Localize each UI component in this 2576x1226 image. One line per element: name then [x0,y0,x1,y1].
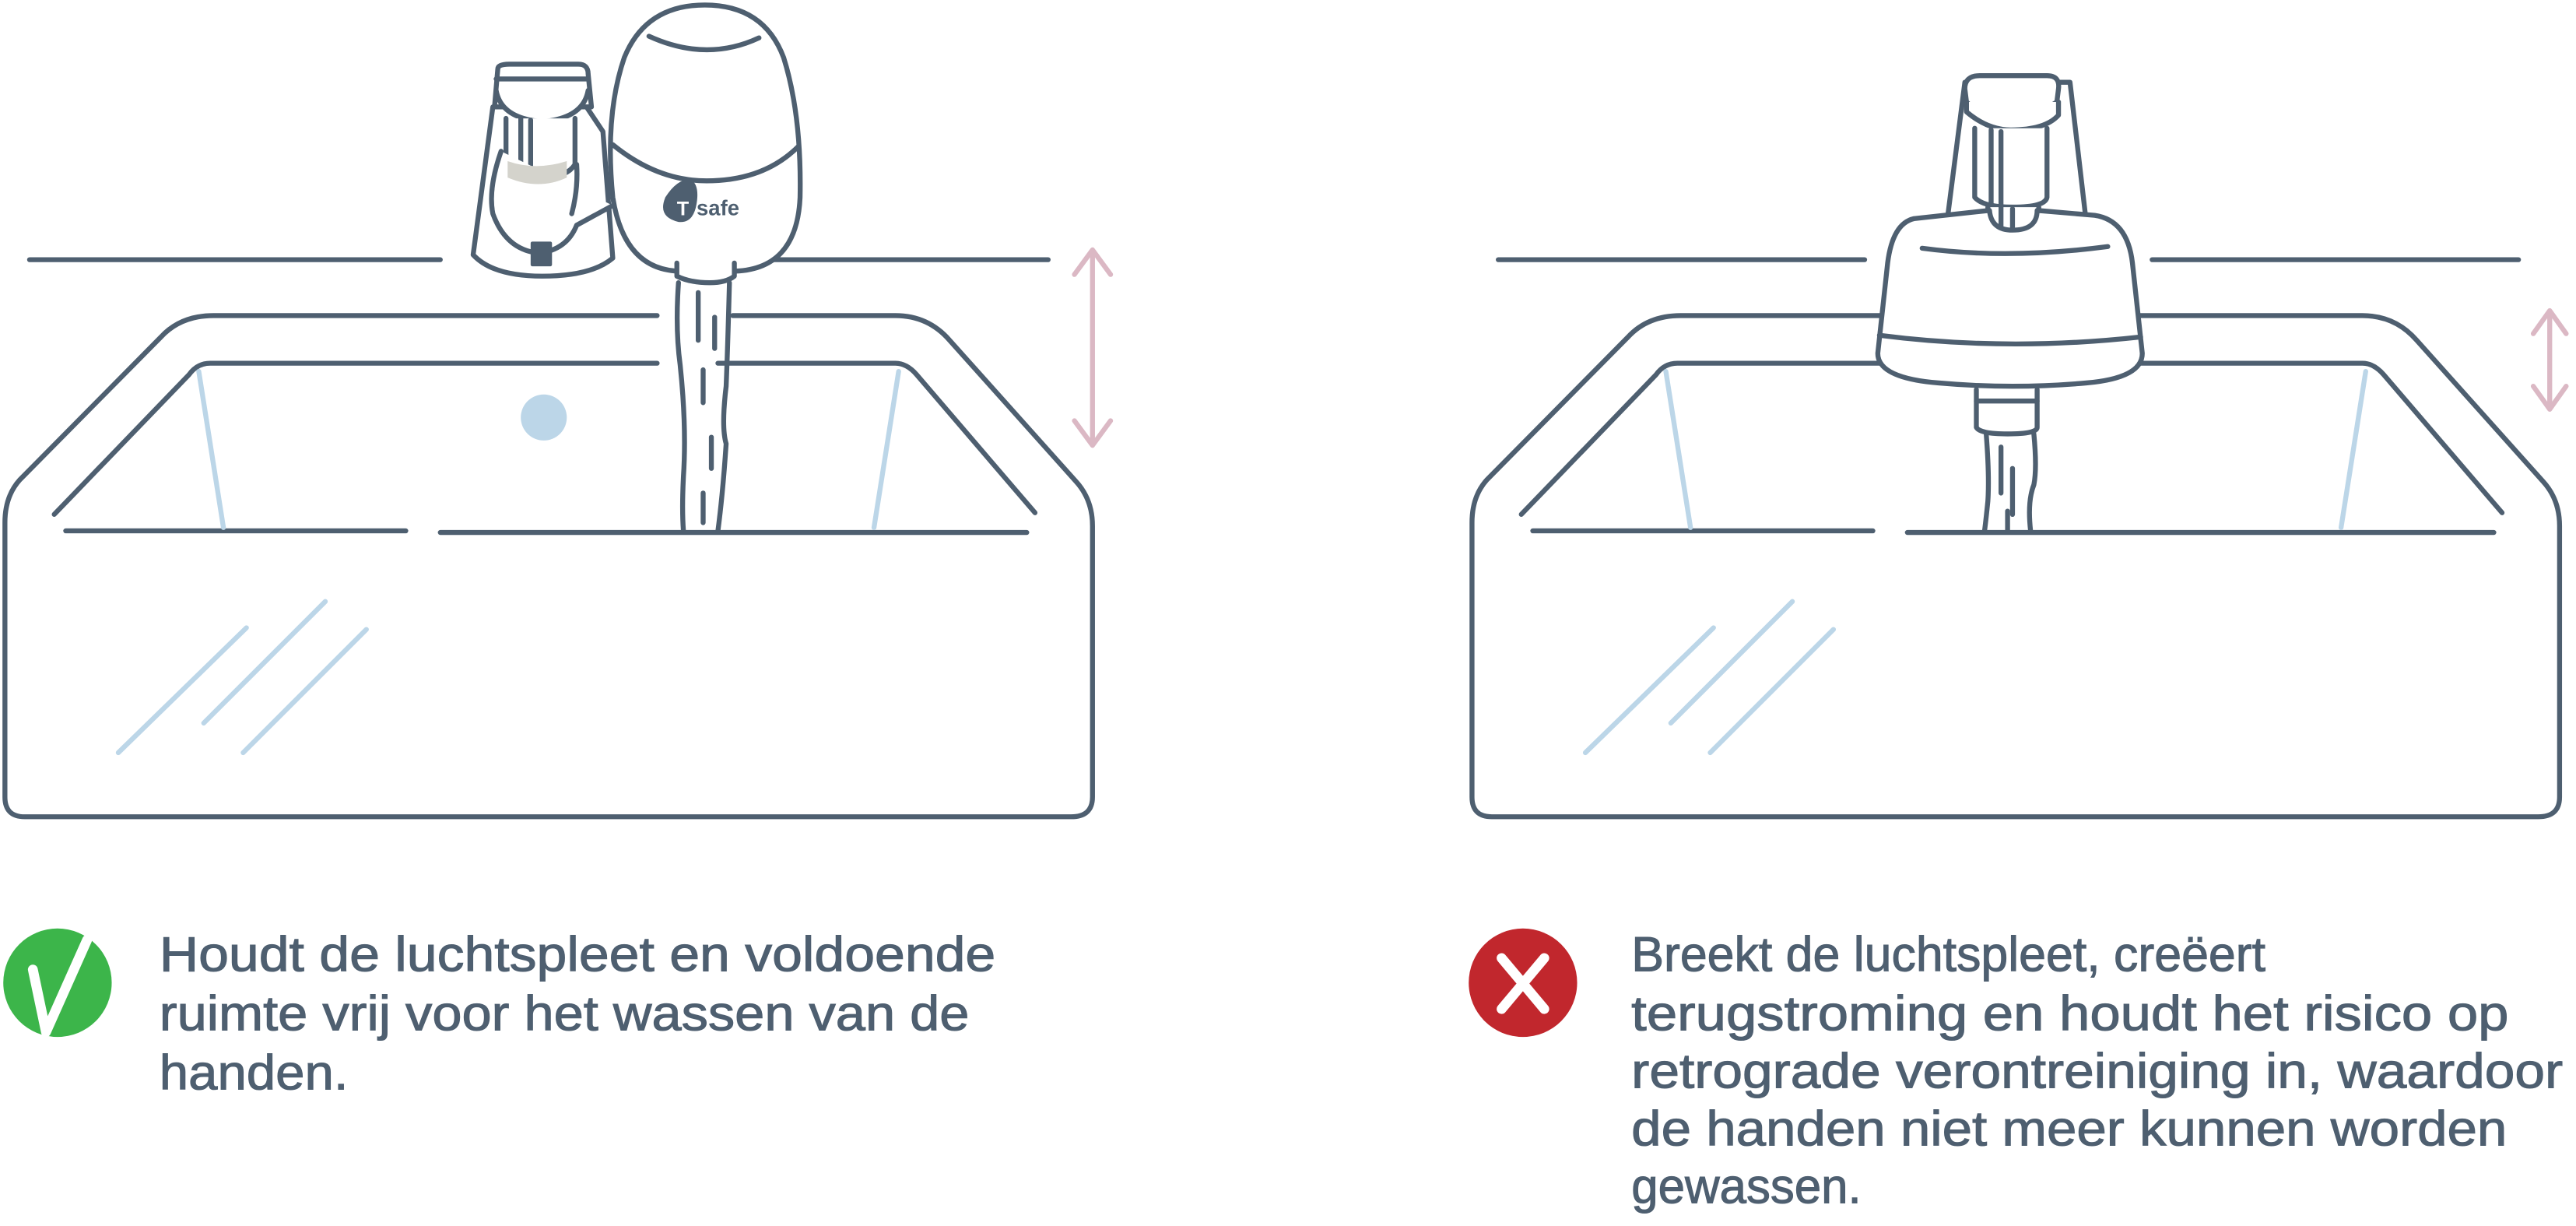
panel: correct sink [5,5,1111,817]
logo: T [677,198,690,220]
text: incorrect caption: retrograde verontreiniging in, waardoor [1631,1045,2563,1099]
sink outer basin [5,315,1093,817]
logo [663,179,739,222]
basin bottom [1533,531,2494,532]
blue reflections [118,371,899,753]
counter lines [30,258,1048,261]
drain [521,395,567,441]
sink inner rim [1521,364,2502,515]
sink outer basin [1472,315,2560,817]
text: incorrect caption [1631,928,2563,1214]
filter Tsafe [610,5,800,283]
faucet tower [1946,76,2086,245]
water stream [1985,434,2035,531]
text: incorrect caption: gewassen. [1631,1159,1862,1214]
basin bottom [65,531,1027,532]
logo: safe [697,196,739,220]
dome cartridge [1878,210,2143,434]
icon: red cross [1469,929,1578,1037]
panel: incorrect sink [1472,76,2566,817]
text: correct caption: Houdt de luchtspleet en voldoende [160,928,995,982]
text: incorrect caption: terugstroming en houdt het risico op [1631,987,2508,1042]
water stream [677,283,729,531]
text: correct caption [160,928,995,1101]
icon: green check [3,929,112,1037]
faucet lever tower [473,64,612,276]
height arrow [1075,250,1111,445]
height arrow [2533,311,2566,409]
blue reflections [1585,371,2366,753]
counter lines [1498,258,2518,261]
text: correct caption: ruimte vrij voor het wassen van de [160,987,969,1042]
text: incorrect caption: Breekt de luchtspleet, creëert [1631,928,2265,982]
sink inner rim [54,364,1035,515]
text: incorrect caption: de handen niet meer kunnen worden [1631,1101,2507,1156]
text: correct caption: handen. [160,1046,349,1101]
